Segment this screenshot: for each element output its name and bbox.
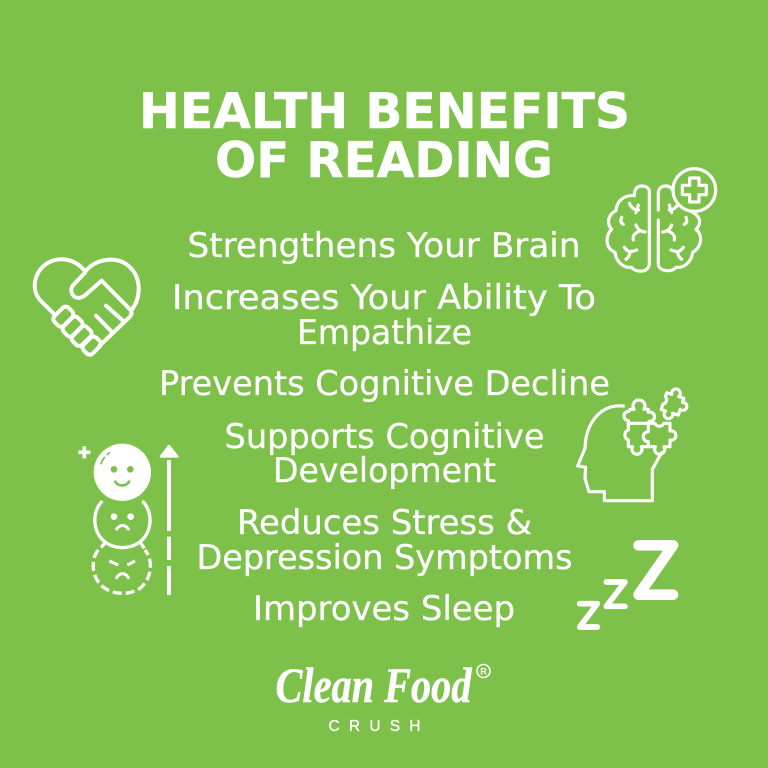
text: supports cognitive development: Development	[273, 451, 496, 490]
icon: sleep zzz	[580, 545, 673, 627]
text: empathy benefit: Increases Your Ability To	[172, 278, 596, 317]
text: supports cognitive development: Supports Cognitive	[224, 417, 544, 456]
text: reduces stress and depression	[196, 503, 572, 577]
title	[139, 83, 630, 189]
logo: Clean Food	[276, 657, 472, 713]
text: reduces stress and depression: Depression Symptoms	[196, 538, 572, 577]
logo: CRUSH	[328, 718, 420, 735]
dashed angry face	[93, 550, 150, 593]
arrow	[161, 446, 178, 595]
happy face	[94, 444, 151, 501]
text: prevents cognitive decline: Prevents Cognitive Decline	[159, 364, 610, 403]
icon: heart handshake	[35, 259, 139, 356]
text: empathy benefit: Empathize	[297, 313, 472, 352]
title: HEALTH BENEFITS	[139, 83, 630, 140]
text: empathy benefit	[172, 278, 596, 352]
text: improves sleep: Improves Sleep	[253, 589, 515, 628]
icon: head with puzzle pieces	[578, 386, 691, 501]
text: reduces stress and depression: Reduces Stress &	[237, 503, 532, 542]
icon: brain with plus	[607, 169, 716, 271]
text: strengthens your brain: Strengthens Your Brain	[188, 226, 580, 265]
logo: R	[480, 666, 487, 676]
title: OF READING	[215, 132, 553, 189]
icon: mood faces with arrow	[78, 444, 178, 595]
plus sign	[78, 446, 90, 458]
text: supports cognitive development	[224, 417, 544, 490]
neutral sad face	[95, 501, 150, 548]
logo	[276, 657, 490, 735]
